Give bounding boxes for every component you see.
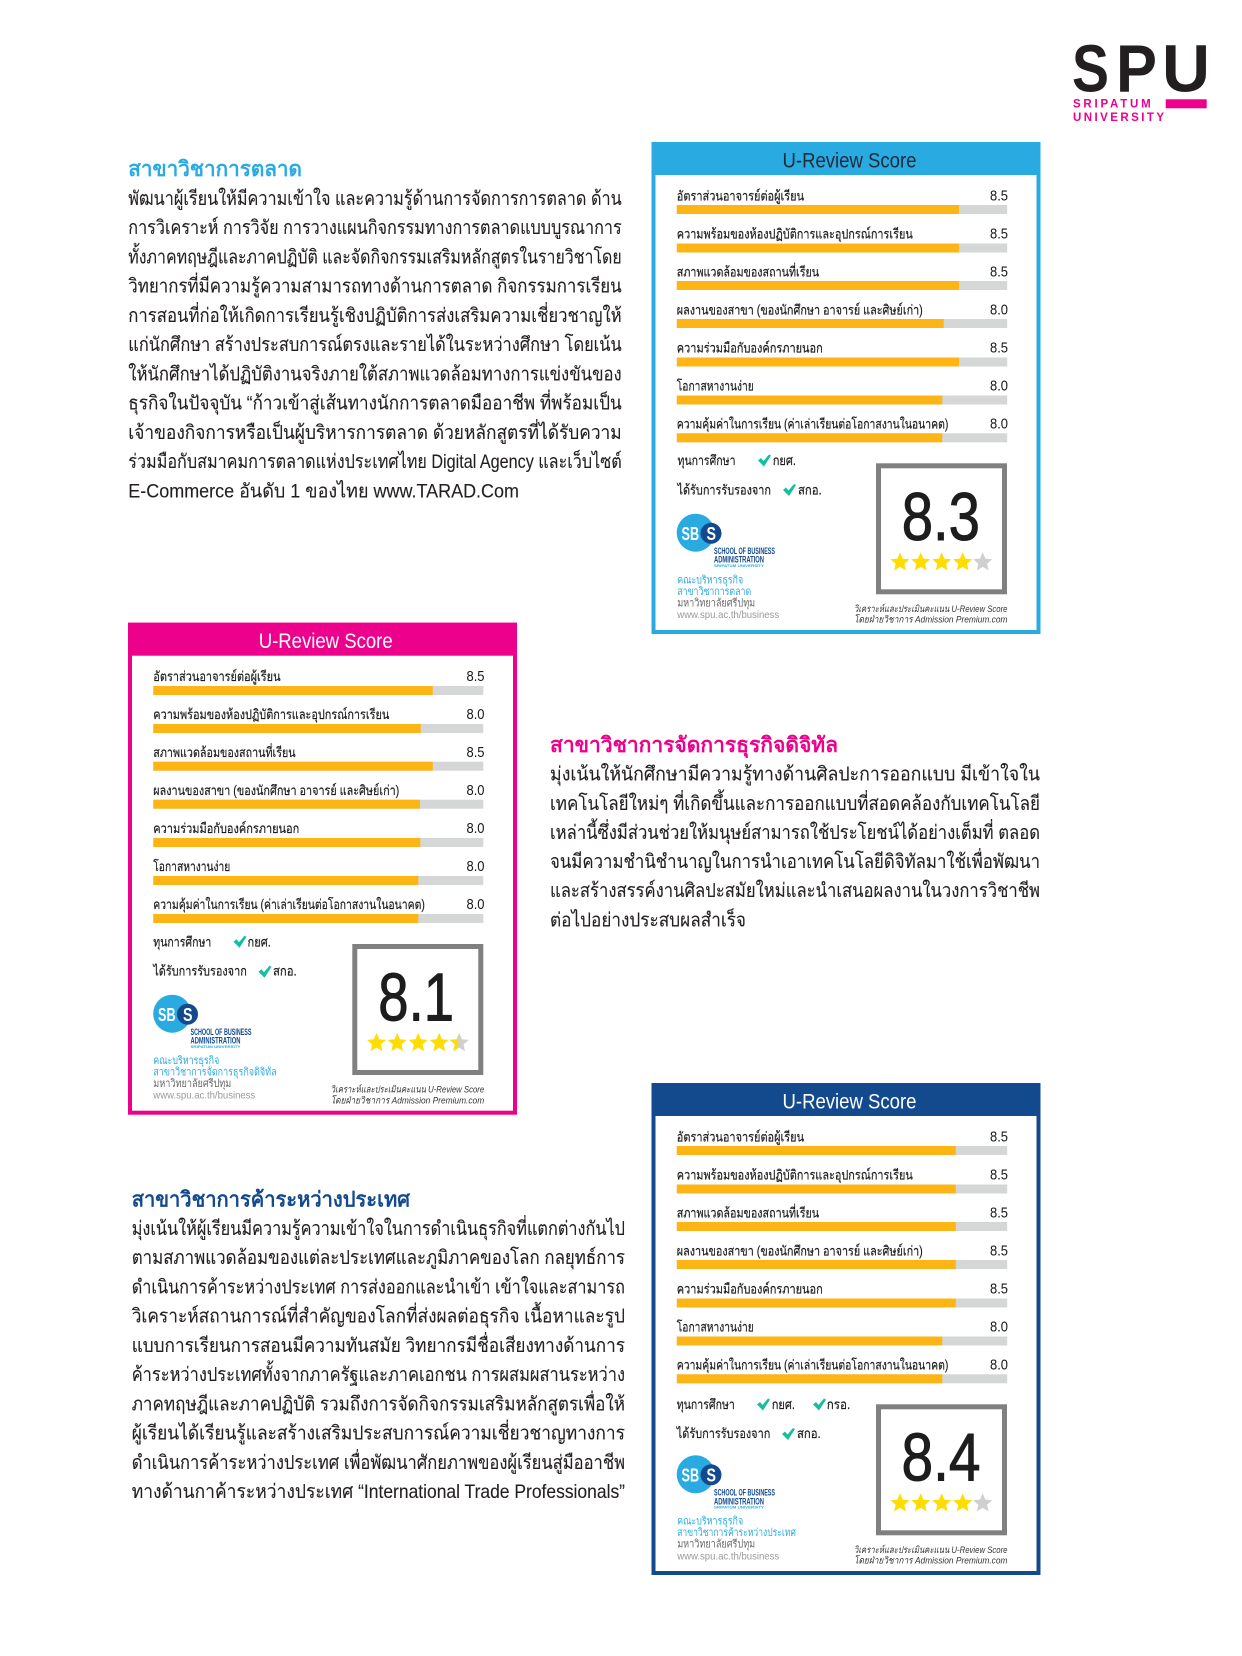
score row 5: ความร่วมมือกับองค์กรภายนอก [153,820,299,836]
score row 5: 8.0 [466,820,484,837]
icon: SBS logo: ADMINISTRATION [190,1036,240,1046]
accreditation row: สกอ. [797,1426,821,1441]
overall score box: 8.1 [378,960,454,1036]
icon: SBS logo: ADMINISTRATION [714,555,764,565]
accreditation row: สกอ. [273,964,297,979]
paragraph: digital business [550,763,1040,931]
accreditation row: ได้รับการรับรองจาก [676,1426,770,1441]
faculty text: www.spu.ac.th/business [152,1090,255,1102]
card header [128,623,517,656]
header title: U-Review Score [782,1090,916,1113]
paragraph: international trade: แบบการเรียนการสอนมีความทันสมัย วิทยากรมีชื่อเสียงทางด้านการ [132,1332,625,1357]
paragraph: marketing: พัฒนาผู้เรียนให้มีความเข้าใจ และความรู้ด้านการจัดการการตลาด ด้าน [128,187,622,211]
paragraph: marketing: ธุรกิจในปัจจุบัน “ก้าวเข้าสู่เส้นทางนักการตลาดมืออาชีพ ที่พร้อมเป็น [128,390,622,416]
accreditation row: สกอ. [798,482,822,497]
logo letter P: P [1116,32,1157,107]
score row 7: ความคุ้มค่าในการเรียน (ค่าเล่าเรียนต่อโอกาสงานในอนาคต) [153,896,425,913]
faculty text: สาขาวิชาการค้าระหว่างประเทศ [677,1527,796,1539]
faculty text: คณะบริหารธุรกิจ [153,1055,219,1067]
score row 7 [677,1356,1008,1383]
paragraph: digital business: มุ่งเน้นให้นักศึกษามีความรู้ทางด้านศิลปะการออกแบบ มีเข้าใจใน [550,763,1040,787]
paragraph: digital business: เทคโนโลยีใหม่ๆ ที่เกิดขึ้นและการออกแบบที่สอดคล้องกับเทคโนโลยี [550,789,1040,815]
card header [652,1083,1040,1116]
score row 5 [677,340,1008,366]
paragraph: marketing: ร่วมมือกับสมาคมการตลาดแห่งประเทศไทย Digital Agency และเว็บไซต์ [128,449,622,473]
icon: SBS logo: S [183,1005,192,1025]
score row 3: สภาพแวดล้อมของสถานที่เรียน [153,743,296,760]
overall score box: 8.3 [902,479,980,555]
paragraph: international trade: วิเคราะห์สถานการณ์ที่สำคัญของโลกที่ส่งผลต่อธุรกิจ เนื้อหาและรูป [132,1302,625,1329]
faculty text [152,1055,277,1102]
scholarship row: กยศ. [773,453,796,468]
score row 4: 8.5 [990,1242,1008,1260]
header title: U-Review Score [259,630,393,653]
faculty text: มหาวิทยาลัยศรีปทุม [677,1538,755,1550]
scholarship row: ทุนการศึกษา [677,1397,735,1413]
score row 6: 8.0 [990,1318,1008,1336]
score row 3 [153,743,485,771]
paragraph: international trade: ค้าระหว่างประเทศทั้งจากภาครัฐและภาคเอกชน การผสมผสานระหว่าง [132,1360,625,1386]
paragraph: international trade: ภาคทฤษฎีและภาคปฏิบัติ รวมถึงการจัดกิจกรรมเสริมหลักสูตรเพื่อให้ [132,1390,625,1416]
credit [854,603,1008,626]
score row 7: 8.0 [990,1356,1008,1374]
score row 2: 8.5 [990,1166,1008,1184]
card frame [130,625,515,1113]
score row 4 [677,302,1008,328]
score row 5 [677,1280,1008,1308]
paragraph: marketing: แก่นักศึกษา สร้างประสบการณ์ตรงและรายได้ในระหว่างศึกษา โดยเน้น [128,333,622,356]
score row 6 [153,858,485,885]
faculty text: มหาวิทยาลัยศรีปทุม [677,596,755,610]
icon: SBS logo: SRIPATUM UNIVERSITY [190,1044,241,1049]
faculty text: www.spu.ac.th/business [676,1550,779,1562]
score row 4: 8.0 [466,782,484,799]
paragraph: international trade: มุ่งเน้นให้ผู้เรียนมีความรู้ความเข้าใจในการดำเนินธุรกิจที่แตกต่างกันไป [132,1215,625,1241]
logo text SRIPATUM: SRIPATUM [1073,99,1151,111]
score row 4 [677,1242,1008,1269]
faculty text: www.spu.ac.th/business [676,609,779,621]
icon: SBS logo [677,514,775,568]
paragraph: marketing [128,187,622,502]
icon: SBS logo: SCHOOL OF BUSINESS [190,1027,252,1037]
icon: SBS logo: SB [682,524,699,544]
paragraph: marketing: วิทยากรที่มีความรู้ความสามารถทางด้านการตลาด กิจกรรมการเรียน [128,273,622,299]
accreditation row: ได้รับการรับรองจาก [152,964,247,979]
overall score box [878,466,1004,592]
scholarship row: กรอ. [827,1397,850,1412]
scholarship row [677,1397,850,1413]
heading: international trade: สาขาวิชาการค้าระหว่างประเทศ [132,1188,411,1212]
score row 1 [677,1128,1008,1155]
credit: โดยฝ่ายวิชาการ Admission Premium.com [854,614,1008,626]
score row 3: 8.5 [990,1204,1008,1222]
score row 3 [677,262,1008,290]
paragraph: international trade: ตามสภาพแวดล้อมของแต่ละประเทศและภูมิภาคของโลก กลยุทธ์การ [132,1246,625,1270]
score row 7: ความคุ้มค่าในการเรียน (ค่าเล่าเรียนต่อโอกาสงานในอนาคต) [677,1356,948,1374]
score row 1: 8.5 [990,1128,1008,1146]
score row 5: 8.5 [990,1280,1008,1298]
score row 6: โอกาสหางานง่าย [153,858,230,874]
icon: SBS logo [153,995,252,1049]
paragraph: digital business: เหล่านี้ซึ่งมีส่วนช่วยให้มนุษย์สามารถใช้ประโยชน์ได้อย่างเต็มที่ ตลอด [550,818,1040,845]
faculty text: สาขาวิชาการจัดการธุรกิจดิจิทัล [153,1067,277,1079]
score row 4 [153,782,485,809]
score row 1: 8.5 [990,188,1008,204]
paragraph: international trade: ดำเนินการค้าระหว่างประเทศ เพื่อพัฒนาศักยภาพของผู้เรียนสู่มืออาชีพ [132,1449,625,1475]
panel: U-Review Score marketing [652,142,1040,632]
credit [854,1544,1008,1567]
paragraph: digital business: และสร้างสรรค์งานศิลปะสมัยใหม่และนำเสนอผลงานในวงการวิชาชีพ [550,879,1040,902]
score row 3: 8.5 [990,264,1008,280]
paragraph: marketing: ให้นักศึกษาได้ปฏิบัติงานจริงภายใต้สภาพแวดล้อมทางการแข่งขันของ [128,362,622,385]
logo letter S: S [1072,32,1109,107]
score row 6: โอกาสหางานง่าย [677,1318,754,1334]
score row 4: ผลงานของสาขา (ของนักศึกษา อาจารย์ และศิษย์เก่า) [677,1242,923,1258]
text block: international trade [132,1188,625,1503]
paragraph: international trade: ดำเนินการค้าระหว่างประเทศ การส่งออกและนำเข้า เข้าใจและสามารถ [132,1275,625,1298]
panel: U-Review Score international trade [652,1083,1040,1573]
icon: SBS logo: SRIPATUM UNIVERSITY [714,563,764,568]
score row 2: ความพร้อมของห้องปฏิบัติการและอุปกรณ์การเรียน [677,1166,913,1184]
panel: U-Review Score digital business [128,623,517,1113]
icon: SBS logo: ADMINISTRATION [714,1496,764,1506]
credit: โดยฝ่ายวิชาการ Admission Premium.com [331,1094,484,1106]
score row 1 [677,188,1008,214]
scholarship row [153,935,271,951]
scholarship row [678,453,796,469]
faculty text [676,574,779,621]
paragraph: marketing: ทั้งภาคทฤษฎีและภาคปฏิบัติ และจัดกิจกรรมเสริมหลักสูตรในรายวิชาโดย [128,242,622,270]
faculty text [676,1516,796,1562]
faculty text: มหาวิทยาลัยศรีปทุม [153,1077,231,1090]
score row 3: สภาพแวดล้อมของสถานที่เรียน [677,262,819,280]
score row 3: 8.5 [466,744,484,761]
score row 2 [153,706,485,733]
card frame [654,1085,1038,1573]
score row 1: อัตราส่วนอาจารย์ต่อผู้เรียน [677,1128,804,1146]
scholarship row: ทุนการศึกษา [678,453,736,469]
score row 7 [153,896,485,923]
score row 7: ความคุ้มค่าในการเรียน (ค่าเล่าเรียนต่อโอกาสงานในอนาคต) [677,416,948,432]
score row 1 [153,668,485,695]
icon: SBS logo: SB [158,1005,176,1025]
score row 2: ความพร้อมของห้องปฏิบัติการและอุปกรณ์การเรียน [677,226,913,242]
paragraph: digital business: จนมีความชำนิชำนาญในการนำเอาเทคโนโลยีดิจิทัลมาใช้เพื่อพัฒนา [550,848,1040,873]
paragraph: marketing: E-Commerce อันดับ 1 ของไทย www.TARAD.Com [128,479,519,502]
card frame [654,144,1038,632]
score row 6: 8.0 [466,858,484,875]
paragraph: marketing: การสอนที่ก่อให้เกิดการเรียนรู้เชิงปฏิบัติการส่งเสริมความเชี่ยวชาญให้ [128,302,622,328]
icon: SBS logo: SB [682,1466,699,1486]
score row 1: 8.5 [466,668,484,685]
card header [652,142,1040,175]
credit [331,1084,484,1106]
icon: SBS logo [677,1455,775,1510]
score row 6 [677,378,1008,404]
score row 2: 8.5 [990,226,1008,242]
paragraph: marketing: เจ้าของกิจการหรือเป็นผู้บริหารการตลาด ด้วยหลักสูตรที่ได้รับความ [128,419,622,445]
score row 2 [677,226,1008,252]
icon: SBS logo: S [706,1466,716,1486]
faculty text: คณะบริหารธุรกิจ [677,1516,743,1528]
score row 5 [153,820,485,847]
score row 6: 8.0 [990,378,1008,394]
overall score box [878,1407,1004,1533]
icon: SBS logo: SCHOOL OF BUSINESS [714,1488,775,1498]
score row 3 [677,1204,1008,1231]
accreditation row: ได้รับการรับรองจาก [677,482,771,497]
score row 2: 8.0 [466,706,484,723]
heading: marketing: สาขาวิชาการตลาด [128,158,302,181]
paragraph: international trade: ทางด้านกาค้าระหว่างประเทศ “International Trade Professionals” [132,1481,625,1503]
credit: โดยฝ่ายวิชาการ Admission Premium.com [854,1555,1008,1567]
score row 6 [677,1318,1008,1346]
icon: SBS logo: SRIPATUM UNIVERSITY [714,1505,764,1510]
score row 4: 8.0 [990,302,1008,318]
scholarship row: กยศ. [772,1397,795,1412]
credit: วิเคราะห์และประเมินคะแนน U-Review Score [854,1544,1008,1556]
score row 7: 8.0 [466,896,484,913]
paragraph: international trade: ผู้เรียนได้เรียนรู้และสร้างเสริมประสบการณ์ความเชี่ยวชาญทางการ [132,1420,625,1446]
faculty text: สาขาวิชาการตลาด [677,586,751,598]
score row 2 [677,1166,1008,1194]
score row 6: โอกาสหางานง่าย [677,378,754,394]
header title: U-Review Score [782,149,916,172]
logo pink bar [1166,99,1207,108]
heading: digital business: สาขาวิชาการจัดการธุรกิจดิจิทัล [550,734,838,759]
score row 7: 8.0 [990,416,1008,432]
scholarship row: กยศ. [248,935,271,950]
icon: SBS logo: SCHOOL OF BUSINESS [714,546,775,556]
score row 3: สภาพแวดล้อมของสถานที่เรียน [677,1204,819,1220]
credit: วิเคราะห์และประเมินคะแนน U-Review Score [331,1084,484,1096]
logo text UNIVERSITY: UNIVERSITY [1073,112,1164,124]
text block: marketing [128,158,622,502]
scholarship row: ทุนการศึกษา [153,935,211,951]
overall score box: 8.4 [902,1420,980,1496]
icon: SBS logo: S [706,524,716,544]
logo: SPU Sripatum University [1072,32,1210,124]
score row 1: อัตราส่วนอาจารย์ต่อผู้เรียน [153,668,281,685]
score row 5: ความร่วมมือกับองค์กรภายนอก [677,1280,823,1296]
paragraph: digital business: ต่อไปอย่างประสบผลสำเร็จ [550,907,746,931]
credit: วิเคราะห์และประเมินคะแนน U-Review Score [854,603,1008,615]
faculty text: คณะบริหารธุรกิจ [677,574,743,586]
score row 7 [677,416,1008,442]
score row 2: ความพร้อมของห้องปฏิบัติการและอุปกรณ์การเรียน [153,706,389,723]
score row 4: ผลงานของสาขา (ของนักศึกษา อาจารย์ และศิษย์เก่า) [153,782,399,798]
score row 5: ความร่วมมือกับองค์กรภายนอก [677,340,823,356]
logo letter U: U [1162,32,1210,107]
paragraph: international trade [132,1215,625,1503]
paragraph: marketing: การวิเคราะห์ การวิจัย การวางแผนกิจกรรมทางการตลาดแบบบูรณาการ [128,216,622,240]
text block: digital business [550,734,1040,931]
overall score box [355,946,481,1072]
score row 5: 8.5 [990,340,1008,356]
score row 4: ผลงานของสาขา (ของนักศึกษา อาจารย์ และศิษย์เก่า) [677,302,923,318]
score row 1: อัตราส่วนอาจารย์ต่อผู้เรียน [677,188,804,204]
